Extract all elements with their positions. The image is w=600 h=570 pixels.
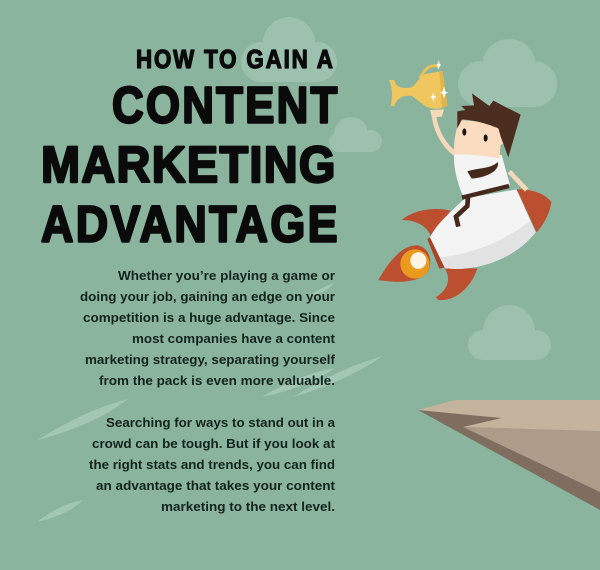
title line: advantage: ADVANTAGE (41, 197, 338, 253)
paragraph two: marketing to the next level. (161, 500, 335, 514)
head (454, 120, 503, 158)
trophy (389, 60, 448, 117)
top right cloud (458, 39, 557, 107)
streak bottom left (37, 500, 83, 522)
rocket lower fin (436, 267, 477, 300)
sparkle three (436, 60, 441, 69)
paragraph one: marketing strategy, separating yourself (85, 353, 336, 367)
trophy foot (389, 80, 412, 106)
cliff (418, 400, 600, 510)
torso (454, 154, 510, 200)
ear (498, 138, 504, 145)
belt (462, 186, 509, 198)
small cloud (329, 117, 382, 152)
flame outer (378, 245, 430, 282)
trophy shade (439, 71, 447, 108)
character riding rocket (378, 60, 551, 300)
rocket upper fin (402, 209, 451, 237)
rocket nose fin (517, 189, 551, 232)
paragraph one: competition is a huge advantage. Since (83, 311, 335, 325)
speed streaks (37, 283, 383, 522)
title line: how to gain a: HOW TO GAIN A (136, 45, 333, 74)
cliff mid face (463, 427, 600, 492)
sparkle one (440, 87, 448, 99)
leg (456, 198, 468, 227)
tie (467, 162, 498, 179)
title (41, 45, 338, 253)
left eye (462, 128, 466, 136)
paragraph two: crowd can be tough. But if you look at (92, 437, 336, 451)
flame core (410, 252, 426, 269)
title line: marketing: MARKETING (41, 137, 335, 193)
trophy cup (407, 71, 447, 109)
trophy handle (420, 66, 439, 78)
rocket nozzle (427, 236, 446, 269)
hair (457, 93, 521, 157)
paragraph one: from the pack is even more valuable. (99, 374, 335, 388)
lower right cloud (468, 305, 551, 360)
rocket body shading (441, 221, 536, 269)
body text (80, 269, 336, 514)
flame ring (400, 249, 430, 279)
paragraph two: an advantage that takes your content (96, 479, 336, 493)
streak near first paragraph (305, 283, 334, 298)
right arm (509, 172, 527, 190)
streak left (38, 399, 128, 440)
clouds (241, 17, 557, 360)
rocket flame (378, 245, 430, 282)
streak upper right (293, 356, 383, 397)
raised arm (434, 113, 455, 154)
rocket body (430, 189, 536, 269)
title line: content: CONTENT (112, 77, 337, 134)
paragraph two: the right stats and trends, you can find (89, 458, 335, 472)
cloud behind title (241, 17, 337, 82)
sparkle two (430, 92, 437, 102)
cliff shadow face (418, 410, 600, 510)
cliff top face (418, 400, 600, 431)
streak middle (262, 368, 335, 397)
paragraph one: Whether you’re playing a game or (118, 269, 335, 283)
paragraph one: most companies have a content (132, 332, 336, 346)
paragraph one: doing your job, gaining an edge on your (80, 290, 335, 304)
right eye (484, 134, 488, 142)
hand (430, 109, 444, 117)
paragraph two (89, 416, 336, 514)
paragraph two: Searching for ways to stand out in a (106, 416, 336, 430)
paragraph one (80, 269, 336, 388)
